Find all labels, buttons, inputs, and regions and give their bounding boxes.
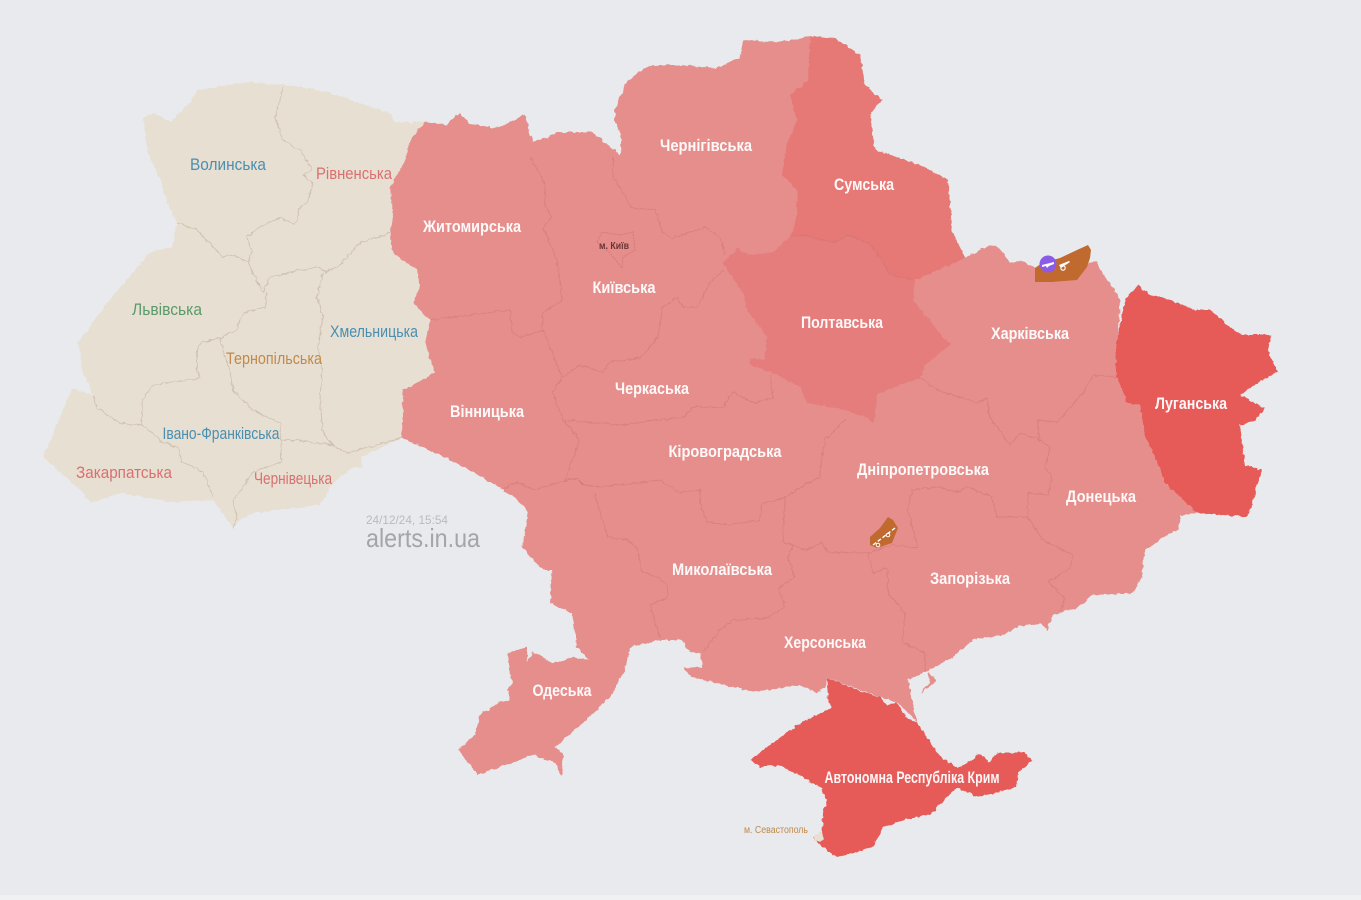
area: Sevastopol xyxy=(813,832,824,842)
panel: western regions without alert xyxy=(43,82,435,528)
icon: cannons Dnipro xyxy=(873,528,895,547)
label: Dnipropetrovsk: Дніпропетровська xyxy=(857,460,989,479)
label: Kirovohrad: Кіровоградська xyxy=(668,442,782,461)
label: Zaporizhzhia: Запорізька xyxy=(930,569,1010,588)
watermark: alerts.in.ua: alerts.in.ua xyxy=(366,523,480,553)
label: Sevastopol: м. Севастополь xyxy=(744,825,808,836)
panel: regions under air alert xyxy=(390,36,1198,777)
label: Donetsk: Донецька xyxy=(1066,487,1136,506)
label: Odesa: Одеська xyxy=(532,681,592,700)
icon: Kyiv city outline xyxy=(597,232,635,268)
label: Ternopil: Тернопільська xyxy=(226,349,322,368)
label: Kharkiv: Харківська xyxy=(991,324,1069,343)
labels: oblast names xyxy=(76,136,1227,836)
label: Khmelnytskyi: Хмельницька xyxy=(330,322,418,341)
label: Vinnytsia: Вінницька xyxy=(450,402,524,421)
region: Sumy oblast xyxy=(782,37,965,280)
area: Kharkiv border shelling zone xyxy=(1035,245,1091,282)
boundary: Sumy and Poltava xyxy=(790,235,915,280)
label: Chernihiv: Чернігівська xyxy=(660,136,752,155)
label: Kyiv city: м. Київ xyxy=(599,241,629,252)
label: Kherson: Херсонська xyxy=(784,633,866,652)
label: Chernivtsi: Чернівецька xyxy=(254,469,332,488)
icon: purple rifle badge xyxy=(1040,256,1056,272)
label: Zhytomyr: Житомирська xyxy=(422,217,521,236)
label: Cherkasy: Черкаська xyxy=(615,379,689,398)
region: Crimea xyxy=(750,678,1032,857)
label: Poltava: Полтавська xyxy=(801,313,883,332)
label: Crimea: Автономна Республіка Крим xyxy=(824,768,1000,787)
region: Poltava oblast xyxy=(723,235,950,423)
label: Luhansk: Луганська xyxy=(1155,394,1227,413)
region: Luhansk oblast xyxy=(1115,285,1277,517)
icon: cannon Kharkiv xyxy=(1059,261,1070,270)
label: Sumy: Сумська xyxy=(834,175,894,194)
label: Mykolaiv: Миколаївська xyxy=(672,560,772,579)
label: Rivne: Рівненська xyxy=(316,164,392,183)
label: Lviv: Львівська xyxy=(132,300,202,319)
label: Kyiv oblast: Київська xyxy=(592,278,656,297)
label: Ivano-Frankivsk: Івано-Франківська xyxy=(162,424,280,443)
timestamp: 24/12/24, 15:54 xyxy=(366,513,448,527)
label: Zakarpattia: Закарпатська xyxy=(76,463,172,482)
area: Dnipro shelling zone xyxy=(870,517,898,548)
label: Volyn: Волинська xyxy=(190,155,266,174)
